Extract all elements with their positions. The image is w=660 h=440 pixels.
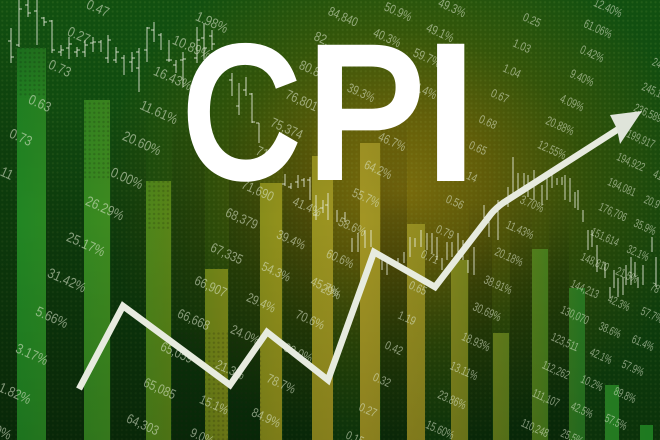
labels: centre left values: 65,059 xyxy=(158,339,195,366)
labels: upper left cluster: 20.60% xyxy=(120,128,164,159)
labels: far right percentages xyxy=(558,168,660,440)
labels: upper right percentages: 30.69% xyxy=(470,300,503,325)
labels: upper left cluster: 0.73 xyxy=(7,125,35,149)
labels: centre left values: 67,335 xyxy=(208,240,245,267)
labels: top centre percentages: 29% xyxy=(319,281,343,303)
labels: upper right percentages: 9.40% xyxy=(568,67,596,90)
labels: right values: 111,107 xyxy=(530,387,561,411)
labels: top centre percentages: 64.2% xyxy=(362,158,394,183)
labels: decimal column: 14 xyxy=(464,169,479,186)
labels: top centre percentages xyxy=(319,0,468,303)
labels: decimal column: 1.04 xyxy=(501,62,523,81)
labels: upper right percentages: 18.93% xyxy=(459,330,492,355)
labels: upper right percentages: 38.91% xyxy=(481,273,514,298)
labels: top centre percentages: 39.3% xyxy=(345,81,377,106)
bar vertical shading xyxy=(17,48,585,440)
labels: centre percentages: 60.0% xyxy=(281,340,315,366)
labels: upper left cluster xyxy=(0,0,231,224)
labels: upper right percentages: 11.43% xyxy=(504,218,536,243)
labels: top centre percentages: 40.3% xyxy=(371,26,403,51)
candlestick wicks xyxy=(11,0,656,298)
labels: far right percentages: 57.5% xyxy=(602,412,629,434)
arrowhead xyxy=(610,111,642,144)
labels: right values xyxy=(519,56,660,440)
labels: lower left cluster: 25.17% xyxy=(64,229,108,260)
title: CPI: P xyxy=(307,10,425,216)
labels: centre left values: 66,907 xyxy=(192,273,229,300)
title: CPI: C xyxy=(183,8,299,215)
labels: top centre percentages: 60.6% xyxy=(324,247,356,272)
labels: upper left cluster: 16.43% xyxy=(151,63,195,94)
labels: right values: 194,081 xyxy=(605,176,638,200)
labels: upper right percentages: 0.42% xyxy=(578,43,606,66)
labels: far right percentages: 61.4% xyxy=(629,333,656,355)
labels: top centre percentages: 84,840 xyxy=(326,4,360,30)
labels: centre left values: 68,379 xyxy=(223,205,260,232)
labels: right values: 176,706 xyxy=(596,201,629,225)
labels: far right percentages: 42.3% xyxy=(605,293,632,315)
labels: lower left cluster: 31.42% xyxy=(45,265,89,296)
labels: centre percentages xyxy=(188,194,342,440)
labels: centre left values: 65,085 xyxy=(141,375,178,402)
labels: centre left values xyxy=(124,28,332,438)
labels: decimal column: 0.32 xyxy=(371,371,393,390)
labels: upper right percentages: 23.86% xyxy=(435,388,468,413)
labels: right values: 148,810 xyxy=(578,251,611,275)
labels: centre percentages: 39.4% xyxy=(274,227,308,253)
labels: decimal column: 0.42 xyxy=(383,339,405,358)
labels: centre percentages: 84.9% xyxy=(249,405,283,431)
bar halftone texture xyxy=(17,48,262,440)
labels: top centre percentages: 49.1% xyxy=(424,21,456,46)
labels: decimal column: 0.71 xyxy=(419,248,441,267)
labels: centre left values: 80.8 xyxy=(297,57,323,80)
labels: far right percentages: 38.6% xyxy=(596,320,623,342)
labels: right values: 112,262 xyxy=(540,359,572,383)
labels: centre percentages: 29.4% xyxy=(244,290,278,316)
labels: decimal column: 1.03 xyxy=(511,37,533,56)
labels: right values: 130,070 xyxy=(558,304,591,328)
labels: far right percentages: 10.2% xyxy=(578,373,605,395)
labels: upper left cluster: 0.73 xyxy=(46,56,74,80)
labels: top centre percentages: 50.9% xyxy=(382,0,414,25)
labels: upper left cluster: 10.89% xyxy=(170,32,214,63)
arrow: rising trend line xyxy=(79,111,642,389)
labels: decimal column: 0.65 xyxy=(467,139,489,158)
labels: lower left cluster: 3.17% xyxy=(13,340,51,369)
labels: far right percentages: 21.5% xyxy=(613,265,640,287)
labels: upper right percentages: 61.06% xyxy=(581,17,614,42)
title: CPI: I xyxy=(425,10,476,216)
labels: lower left cluster: 5.66% xyxy=(33,303,71,332)
labels: centre percentages: 41.4% xyxy=(290,194,324,220)
labels: decimal column xyxy=(344,11,543,440)
labels: right values: 151,614 xyxy=(588,226,621,250)
labels: decimal column: 0.25 xyxy=(521,11,543,30)
labels: far right percentages: 57.9% xyxy=(619,358,646,380)
labels: upper right percentages: 12.55% xyxy=(535,138,568,163)
labels: centre left values: 71,690 xyxy=(239,177,276,204)
labels: far right percentages: 89.8% xyxy=(611,385,638,407)
labels: centre percentages: 45.7% xyxy=(308,274,342,300)
labels: top centre percentages: 59.7% xyxy=(411,46,443,71)
labels: centre percentages: 15.1% xyxy=(197,392,231,418)
labels: right values: 144,213 xyxy=(568,278,601,302)
labels: upper left cluster: 1.98% xyxy=(193,8,231,37)
labels: centre percentages: 70.6% xyxy=(293,307,327,333)
labels: upper right percentages: 4.09% xyxy=(558,92,586,115)
labels: top centre percentages: 46.7% xyxy=(376,130,408,155)
labels: decimal column: 0.65 xyxy=(407,279,429,298)
labels: centre left values: 82, xyxy=(312,28,332,49)
labels: right values: 199,917 xyxy=(624,128,657,152)
labels: upper right percentages: 13.11% xyxy=(448,359,480,384)
labels: upper right percentages: 20.88% xyxy=(543,114,576,139)
labels: decimal column: 1.19 xyxy=(396,309,418,328)
labels: right values: 194,922 xyxy=(614,151,647,175)
labels: centre left values: 711 xyxy=(254,143,276,164)
labels: upper left cluster: 26.29% xyxy=(83,193,127,224)
labels: centre left values: 64,303 xyxy=(124,411,161,438)
labels: centre percentages: 21.3% xyxy=(213,357,247,383)
candlestick ticks xyxy=(8,5,328,215)
labels: centre left values: 76,801 xyxy=(283,87,320,114)
labels: lower left cluster xyxy=(0,229,108,440)
labels: centre left values: 75,374 xyxy=(268,115,305,142)
labels: centre left values: 66,668 xyxy=(175,306,212,333)
labels: centre percentages: 24.0% xyxy=(228,322,262,348)
labels: upper left cluster: 0.63 xyxy=(26,91,54,115)
labels: decimal column: 0.79 xyxy=(434,223,456,242)
labels: upper left cluster: 0.27 xyxy=(65,23,93,47)
labels: top centre percentages: 55.7% xyxy=(350,186,382,211)
title: CPI xyxy=(183,8,476,216)
labels: far right percentages: 35.9% xyxy=(631,217,658,239)
labels: upper right percentages: 3.70% xyxy=(518,193,546,216)
labels: upper right percentages: 20.18% xyxy=(492,245,525,270)
labels: upper left cluster: 11.61% xyxy=(138,97,181,128)
labels: upper right percentages xyxy=(423,0,624,440)
labels: far right percentages: 32.1% xyxy=(624,243,651,265)
labels: decimal column: 0.68 xyxy=(477,113,499,132)
labels: centre percentages: 54.3% xyxy=(259,259,293,285)
labels: right values: 123,511 xyxy=(549,331,581,355)
labels: decimal column: 0.67 xyxy=(489,87,511,106)
labels: centre percentages: 78.7% xyxy=(264,371,298,397)
labels: top centre percentages: 54.4% xyxy=(407,78,439,103)
labels: upper left cluster: 0.00% xyxy=(108,164,146,193)
labels: far right percentages: 42.5% xyxy=(568,400,595,422)
labels: decimal column: 0.27 xyxy=(357,401,379,420)
labels: far right percentages: 42.1% xyxy=(587,346,614,368)
candlestick price series xyxy=(8,0,656,298)
labels: decimal column: 0.56 xyxy=(444,193,466,212)
labels: top centre percentages: 58.6% xyxy=(336,215,368,240)
